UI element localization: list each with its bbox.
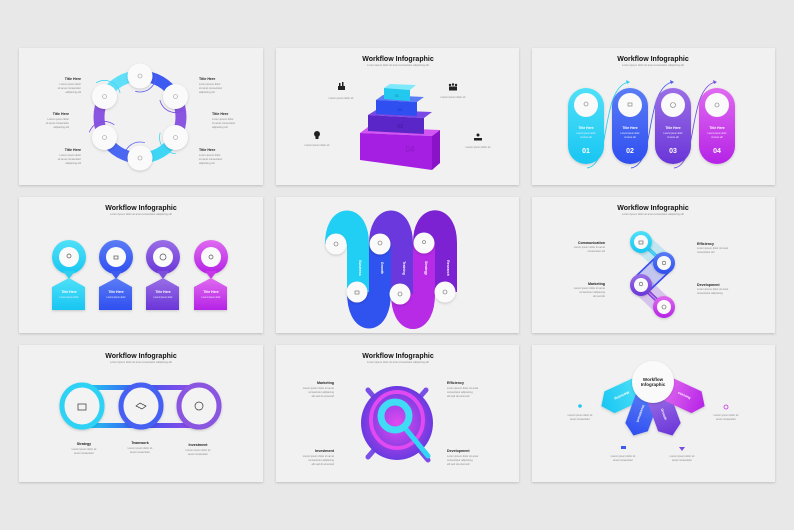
text: labels: elit sed do eiusmod [447,394,470,398]
text: right top: Lorem ipsum dolor sit [441,95,466,99]
panel: slide 3 pills: sit amet elit [580,136,592,139]
chart: target [361,386,433,460]
panel: slide 4 pins [19,197,263,333]
text: left top: Lorem ipsum dolor sit [329,96,354,100]
panel: slide 2 pyramid [276,48,519,185]
chart: petals: Investment [635,405,645,424]
text: labels: consectetur adipiscing [447,458,473,462]
text: labels: amet consectetur [130,450,150,454]
text: labels [303,381,479,466]
text: right labels: Lorem ipsum dolor [212,117,234,121]
text: left labels: sit amet consectetur [58,157,81,161]
icons and texts: Lorem ipsum dolor sit [714,413,739,417]
text: left labels: sit amet consectetur [58,86,81,90]
text: labels [574,241,729,298]
panel: slide 4 pins: Title Here [108,290,124,294]
icons and texts [568,404,739,462]
text: right labels: sit amet consectetur [212,121,235,125]
text: ribbon labels [358,260,450,276]
center circle title: Infographic [641,382,666,387]
panel: slide 4 pins: Title Here [203,290,219,294]
panel: slide 3 pills [532,48,775,185]
text: left labels: Title Here [65,77,81,81]
text: labels: consectetur adipiscing [308,390,335,394]
text: ribbon labels: Strategy [424,261,428,275]
text: ribbon labels: Training [402,261,406,275]
chart: pin shapes [52,240,228,310]
text: labels: Lorem ipsum dolor sit amet [574,245,605,249]
text: labels: Lorem ipsum dolor sit amet [303,454,334,458]
panel: slide 3 pills: Title Here [709,126,725,130]
icons and texts: amet consectetur [716,417,736,421]
chart: pyramid steps: 02 [398,107,403,112]
icons and texts: amet consectetur [672,458,692,462]
text: labels: Lorem ipsum dolor sit amet [447,386,479,390]
chart: connecting bars [82,385,199,428]
panel: slide 3 pills: 04 [713,148,721,155]
text: labels: consectetur elit [697,250,715,254]
text: labels: Lorem ipsum dolor sit [128,446,153,450]
icons: rings [62,385,219,427]
text: labels: Lorem ipsum dolor sit [186,448,211,452]
panel: slide 3 pills: Lorem ipsum dolor sit amet consectetur adipiscing elit [622,63,684,67]
panel: slide 3 pills: 02 [626,148,634,155]
panel: slide 4 pins: Lorem ipsum dolor [153,296,173,299]
text: labels: Investment [315,449,335,453]
panel: slide 3 pills: 03 [669,148,677,155]
chart: pills [568,88,735,164]
text: labels: Lorem ipsum dolor sit [72,447,97,451]
text: right labels: adipiscing elit [199,161,215,165]
panel: slide 6 chain: Lorem ipsum dolor sit amet consectetur adipiscing elit [622,212,684,216]
panel: slide 3 pills: sit amet elit [711,136,723,139]
panel: slide 3 pills: Lorem ipsum dolor [576,132,596,135]
title: Workflow Infographic [362,353,434,360]
text: left labels: Title Here [53,112,69,116]
icons and texts: amet consectetur [613,458,633,462]
panel: slide 6 chain [532,197,775,333]
text: left labels: Title Here [65,148,81,152]
text: left labels: Lorem ipsum dolor [60,82,81,86]
text: labels: Teamwork [131,441,149,445]
text: left labels [46,77,81,165]
icons: chain nodes [630,231,675,318]
panel: slide 8 target: Lorem ipsum dolor sit amet consectetur adipiscing elit [367,360,429,364]
text: labels: Development [697,283,720,287]
center circle title [632,361,674,403]
text: left labels: adipiscing elit [65,90,81,94]
panel: slide 3 pills: Lorem ipsum dolor [707,132,727,135]
center circle title: Workflow [643,377,664,382]
title: Workflow Infographic [617,56,689,63]
panel: slide 4 pins: Title Here [61,290,77,294]
chart: petals [596,376,710,440]
text: ribbon labels: Business [358,260,362,276]
title: Workflow Infographic [105,353,177,360]
text: labels: Efficiency [447,381,464,385]
text: labels: elit sed do eiusmod [312,462,335,466]
text: labels: elit sed do eiusmod [447,462,470,466]
text: labels: Efficiency [697,242,714,246]
icons: ring nodes [92,64,188,170]
panel: slide 7 rings [19,345,263,482]
panel: slide 4 pins: Lorem ipsum dolor sit amet consectetur adipiscing elit [110,212,172,216]
chart: links [633,236,672,313]
text: right labels: Lorem ipsum dolor [199,153,221,157]
text: left labels: adipiscing elit [53,125,69,129]
text: labels: Lorem ipsum dolor sit amet [574,286,605,290]
chart: ribbon [336,221,446,318]
icons and texts: Lorem ipsum dolor sit [611,454,636,458]
text: right labels [199,77,235,165]
panel: slide 5 serpentine [276,197,519,333]
text: labels: consectetur adipiscing [579,290,606,294]
text: labels: amet consectetur [188,452,208,456]
chart: pyramid steps: 03 [397,124,403,130]
text: labels: Investment [189,443,208,447]
text: right labels: Title Here [199,148,215,152]
text: labels: Marketing [588,282,605,286]
panel: slide 3 pills: Lorem ipsum dolor [620,132,640,135]
text: right labels: adipiscing elit [212,125,228,129]
panel: slide 3 pills: 01 [582,148,590,155]
text: right labels: Lorem ipsum dolor [199,82,221,86]
text: labels: elit sed do [593,294,606,298]
text: labels: consectetur adipiscing [447,390,473,394]
panel: slide 3 pills: Title Here [578,126,594,130]
text: left bottom: Lorem ipsum dolor sit [305,143,330,147]
panel: slide 3 pills: sit amet elit [624,136,636,139]
text: right labels: sit amet consectetur [199,157,222,161]
panel: slide 3 pills: sit amet elit [667,136,679,139]
text: right labels: adipiscing elit [199,90,215,94]
text: labels: consectetur elit [588,249,605,253]
panel: slide 3 pills: Lorem ipsum dolor [663,132,683,135]
icon: bulb [314,131,320,139]
panel: slide 4 pins: Lorem ipsum dolor [106,296,126,299]
text: labels: Lorem ipsum dolor sit amet [697,246,729,250]
icons and texts: Lorem ipsum dolor sit [670,454,695,458]
text: labels [72,441,211,456]
panel: slide 9 fan [532,345,775,482]
chart: petals: Success [677,391,691,400]
title: Workflow Infographic [105,205,177,212]
chart: ring segments [99,76,181,158]
chart: petals: Growth [660,408,668,421]
text: labels: Communication [578,241,605,245]
chart: pyramid steps [360,84,440,170]
title: Workflow Infographic [617,205,689,212]
panel: slide 8 target [276,345,519,482]
text: labels: consectetur adipiscing [697,291,723,295]
icon: hand [474,134,482,140]
text: labels: Strategy [77,442,91,446]
panel: slide 4 pins: Title Here [155,290,171,294]
text: labels: amet consectetur [74,451,94,455]
panel: slide 2 pyramid: Lorem ipsum dolor sit amet consectetur adipiscing elit [367,63,429,67]
panel: slide 4 pins: Lorem ipsum dolor [201,296,221,299]
text: ribbon labels: Growth [380,262,384,274]
text: right labels: sit amet consectetur [199,86,222,90]
text: ribbon labels: Research [446,260,450,276]
text: right labels: Title Here [212,112,228,116]
text: labels: Marketing [317,381,334,385]
text: left labels: Lorem ipsum dolor [60,153,81,157]
text: right labels: Title Here [199,77,215,81]
text: labels: Lorem ipsum dolor sit amet [303,386,334,390]
icons: white nodes [326,232,456,304]
text: labels: Development [447,449,470,453]
icons and texts: Lorem ipsum dolor sit [568,413,593,417]
arrows [587,82,715,168]
text: labels: Lorem ipsum dolor sit amet [447,454,479,458]
icons and texts: amet consectetur [570,417,590,421]
text: left labels: sit amet consectetur [46,121,69,125]
chart: pyramid steps: 01 [395,94,399,98]
panel: slide 4 pins: Lorem ipsum dolor [59,296,79,299]
icon: chart [338,82,345,90]
chart: petals: Marketing [614,390,630,401]
text: left labels: adipiscing elit [65,161,81,165]
text: labels: Lorem ipsum dolor sit amet [697,287,729,291]
title: Workflow Infographic [362,56,434,63]
panel: slide 7 rings: Lorem ipsum dolor sit amet consectetur adipiscing elit [110,360,172,364]
text: left labels: Lorem ipsum dolor [48,117,69,121]
text: right bottom: Lorem ipsum dolor sit [466,145,491,149]
text: labels: elit sed do eiusmod [312,394,335,398]
icon: people [449,83,457,90]
chart: pyramid steps: 04 [406,145,415,154]
panel: slide 3 pills: Title Here [665,126,681,130]
text: labels: consectetur adipiscing [308,458,335,462]
panel: slide 1 hexagon cycle [19,48,263,185]
panel: slide 3 pills: Title Here [622,126,638,130]
